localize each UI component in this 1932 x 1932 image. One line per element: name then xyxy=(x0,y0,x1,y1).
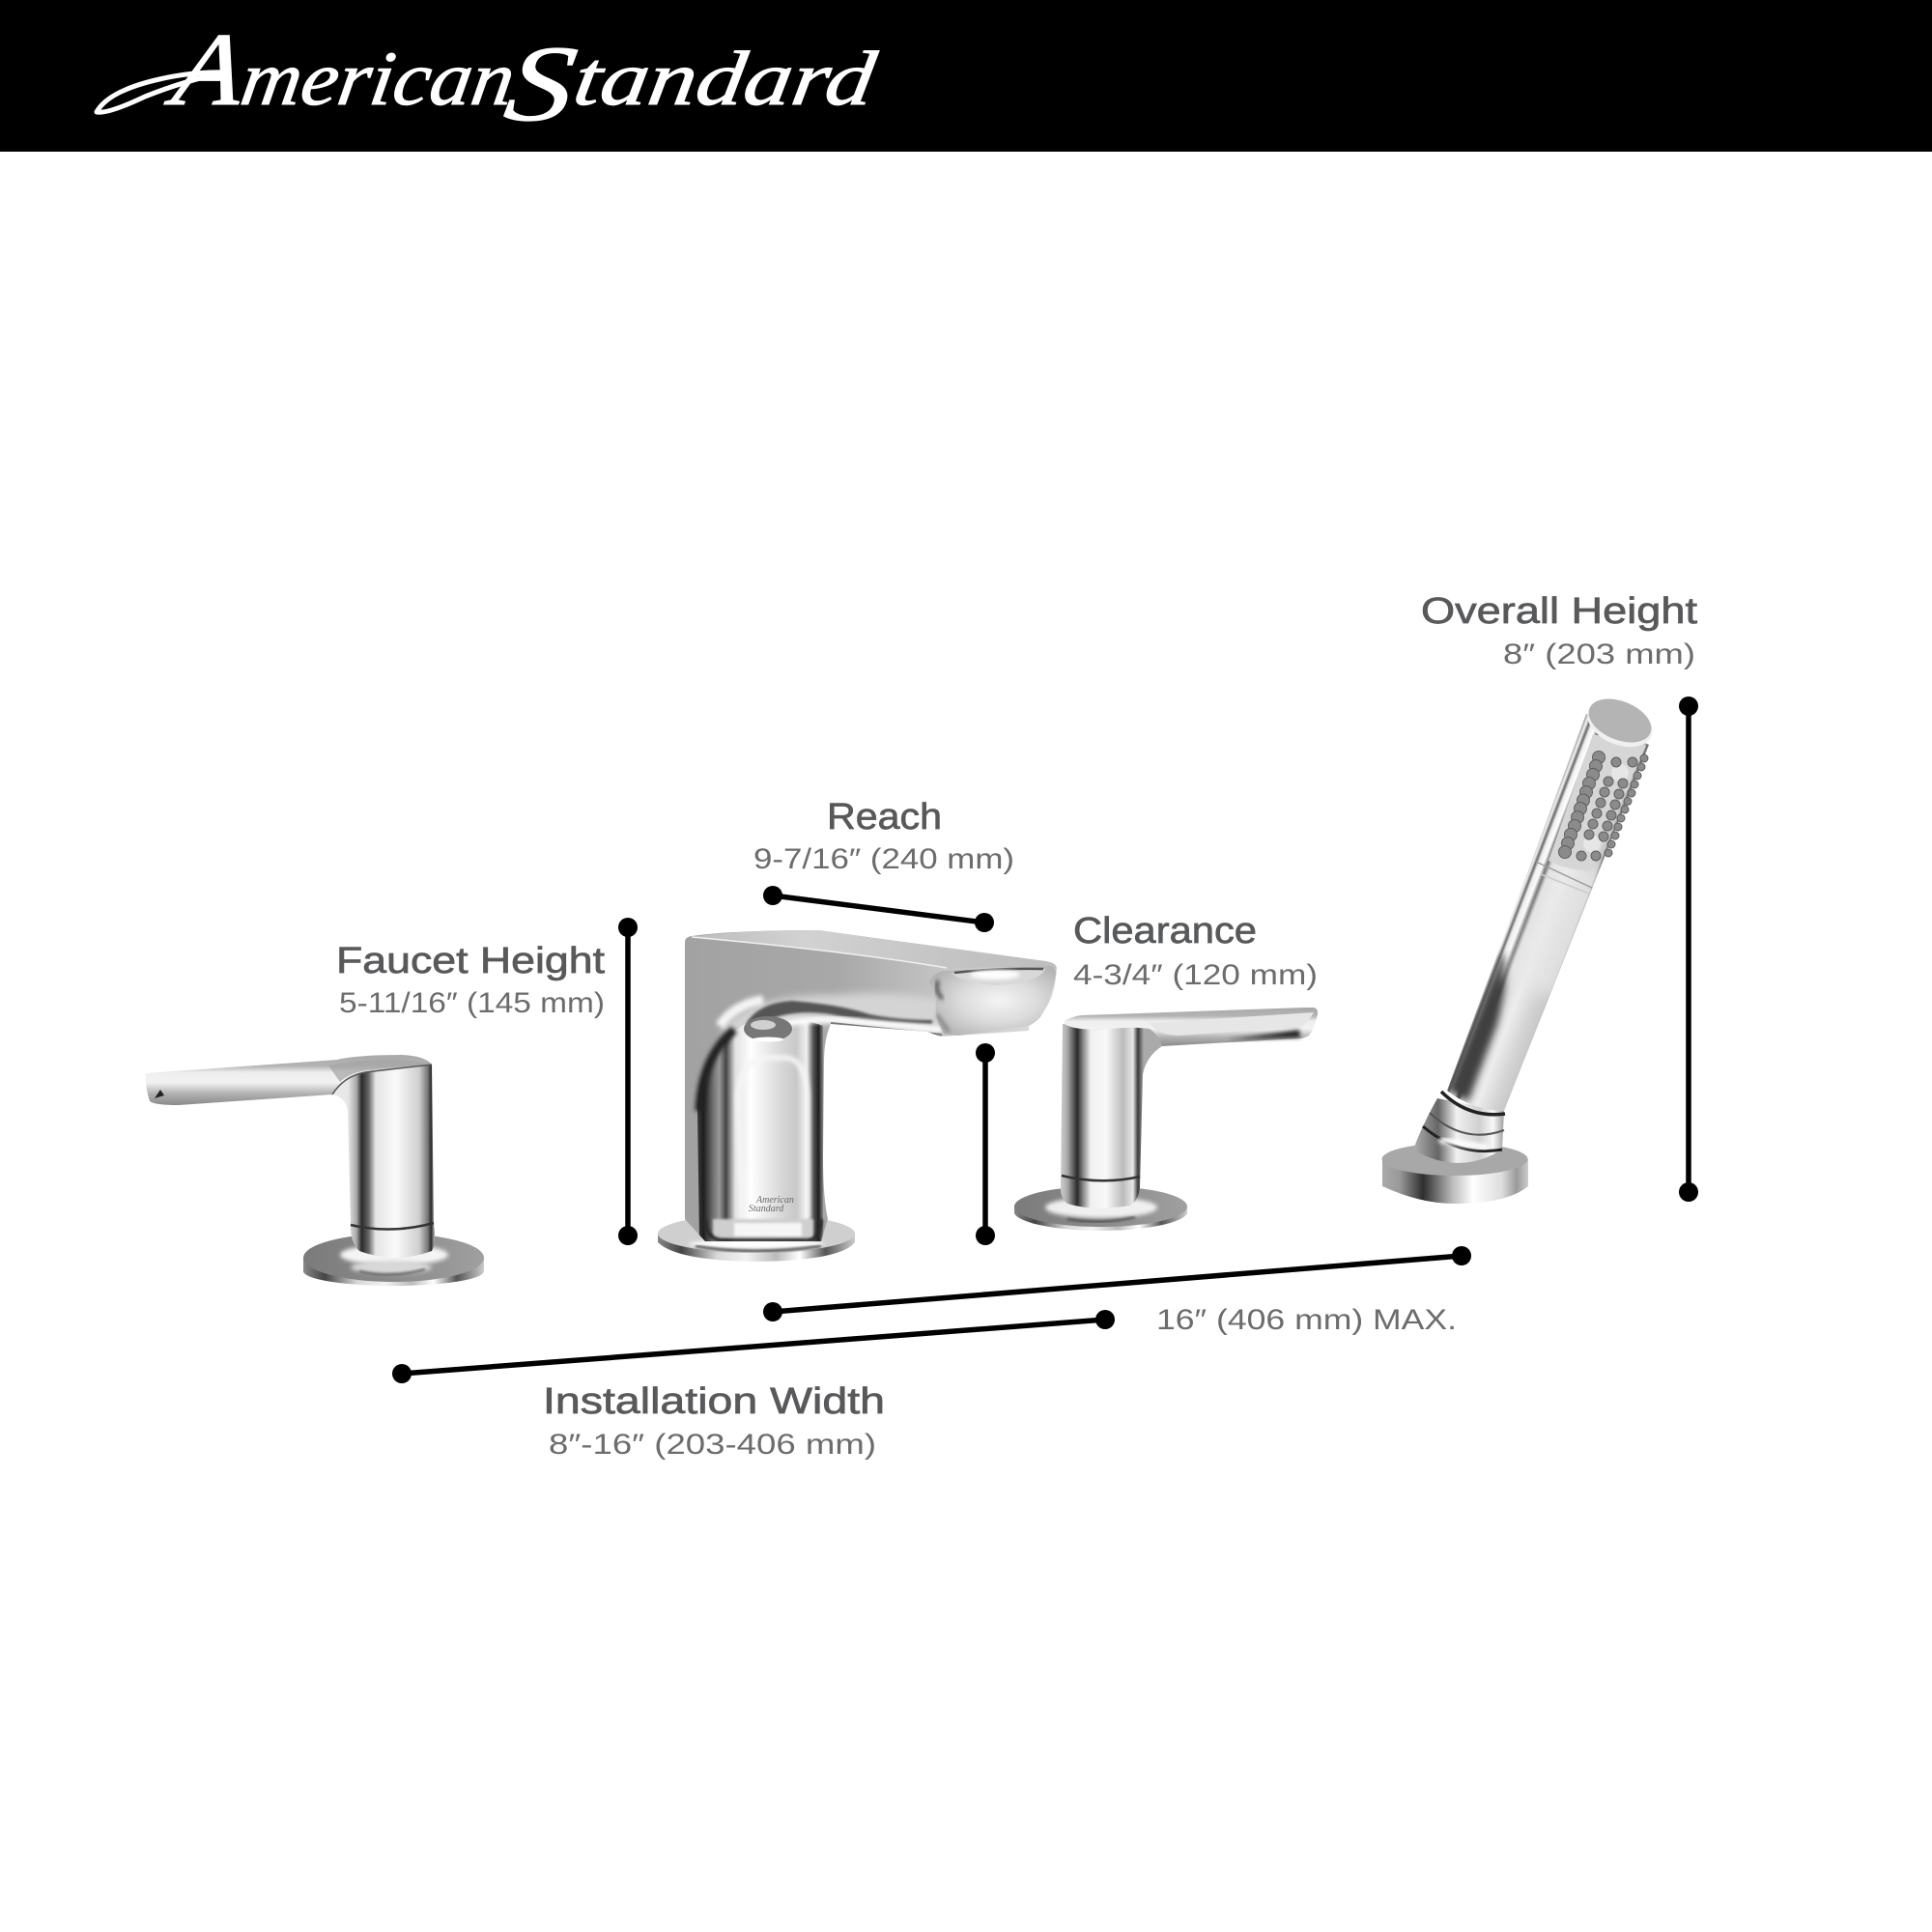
right handle base disc xyxy=(1014,1186,1187,1231)
logo: American Standard: American xyxy=(160,12,525,128)
shower handle body xyxy=(1447,714,1649,1111)
reach label xyxy=(753,797,1014,875)
overall height dimension xyxy=(1679,696,1698,1202)
shower spray face xyxy=(1548,734,1648,871)
center spout faucet xyxy=(658,930,1057,1262)
shower head end cap xyxy=(1580,691,1660,756)
faucet height label: 5-11/16″ (145 mm) xyxy=(339,987,605,1019)
installation width label: Installation Width xyxy=(543,1381,885,1422)
installation width label xyxy=(543,1381,885,1461)
shower nozzles xyxy=(1559,752,1648,861)
left handle lever xyxy=(146,1055,432,1105)
faucet height label xyxy=(336,941,606,1019)
left handle base disc xyxy=(303,1234,484,1286)
installation width label: 8″-16″ (203-406 mm) xyxy=(549,1429,876,1461)
shower neck and collar xyxy=(1413,1092,1505,1163)
header band xyxy=(0,0,1932,152)
maximum installation dimension xyxy=(763,1246,1471,1321)
clearance label: Clearance xyxy=(1073,911,1257,952)
spout base disc xyxy=(658,1214,855,1262)
spout logo mark: American xyxy=(755,1195,794,1206)
spout reflections xyxy=(692,930,1057,1241)
shower base disc xyxy=(1381,1143,1528,1204)
overall height label xyxy=(1421,591,1698,670)
reach label: Reach xyxy=(827,797,942,838)
spout outlet bowl xyxy=(929,966,1056,1036)
left handle xyxy=(146,1055,484,1286)
right handle stem xyxy=(1061,1024,1162,1208)
faucet height dimension xyxy=(618,918,638,1245)
reach label: 9-7/16″ (240 mm) xyxy=(753,843,1014,875)
logo: American Standard: S xyxy=(498,25,583,144)
reach dimension xyxy=(763,886,994,932)
faucet height label: Faucet Height xyxy=(336,941,606,981)
clearance dimension xyxy=(976,1043,995,1245)
maximum installation label: 16″ (406 mm) MAX. xyxy=(1156,1304,1457,1336)
right handle xyxy=(1014,1008,1318,1231)
shower body reflections xyxy=(1447,850,1613,1101)
spout logo mark: Standard xyxy=(749,1204,784,1214)
overall height label: Overall Height xyxy=(1421,591,1698,632)
logo: American Standard xyxy=(97,12,884,144)
logo: American Standard: tandard xyxy=(568,36,882,122)
hand shower xyxy=(1381,691,1660,1204)
clearance label: 4-3/4″ (120 mm) xyxy=(1073,959,1318,991)
spout body silhouette xyxy=(685,930,1057,1241)
installation width dimension xyxy=(392,1310,1115,1383)
left handle stem xyxy=(332,1065,435,1258)
clearance label xyxy=(1073,911,1318,991)
right handle lever xyxy=(1065,1008,1318,1046)
overall height label: 8″ (203 mm) xyxy=(1503,639,1695,670)
